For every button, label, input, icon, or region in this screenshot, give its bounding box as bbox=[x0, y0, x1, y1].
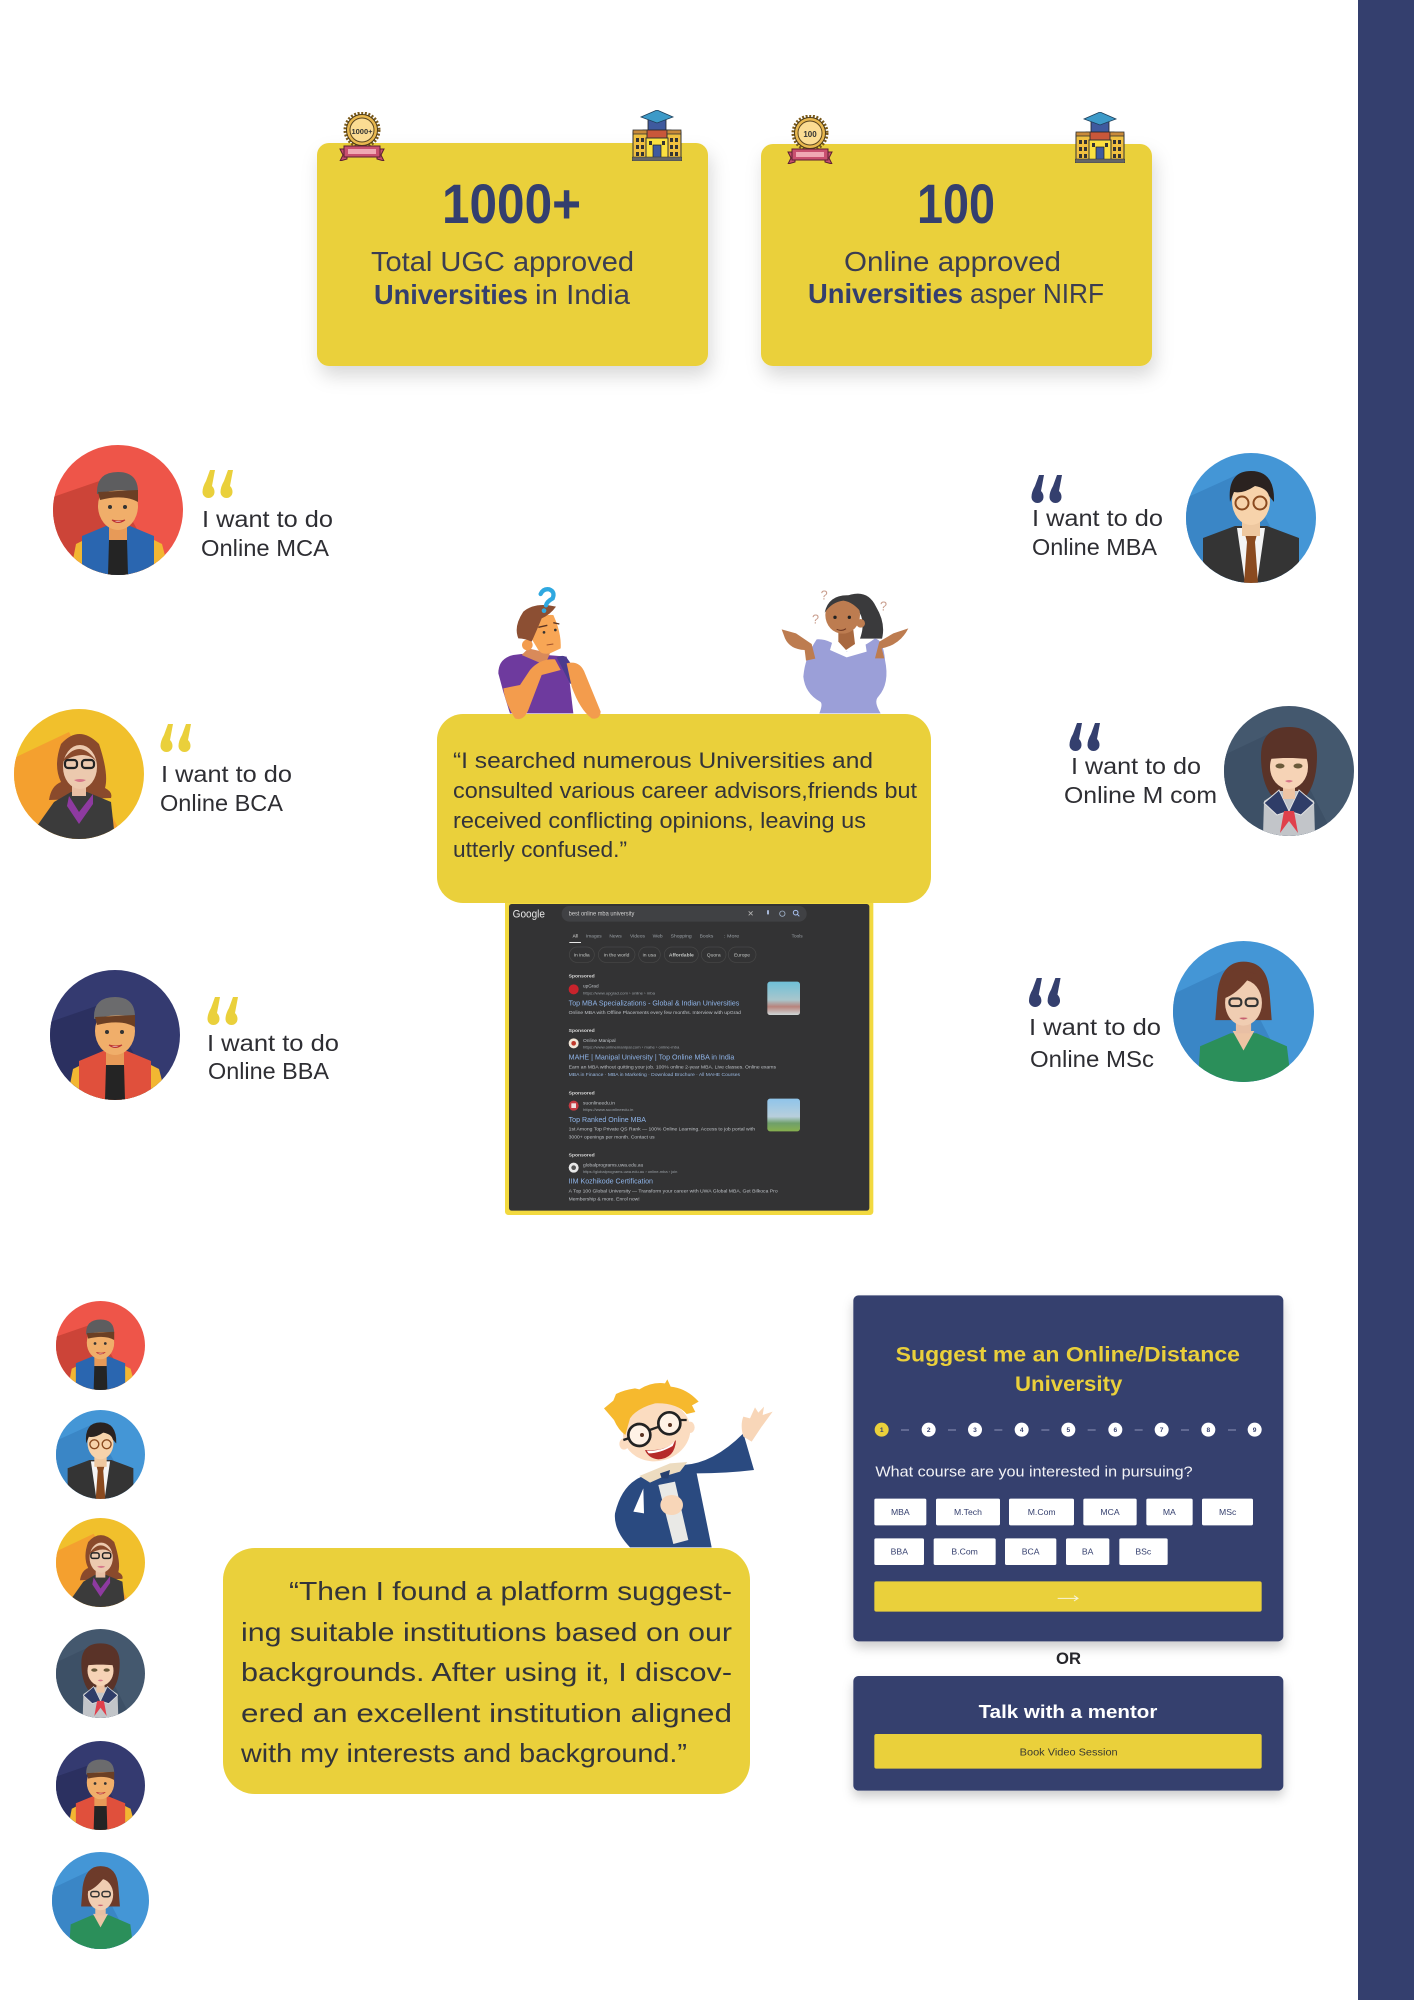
course option buttons bbox=[874, 1499, 1253, 1565]
course option buttons: MCA bbox=[1100, 1507, 1120, 1517]
step indicator 1 to 9: 1 bbox=[880, 1427, 884, 1434]
course option buttons: MBA bbox=[891, 1507, 910, 1517]
screenshot: Google search results: Affordable bbox=[669, 952, 694, 958]
speech text: Online M com bbox=[1064, 782, 1217, 808]
form title bbox=[896, 1344, 1240, 1396]
stat description: Total UGC approved bbox=[371, 246, 634, 277]
icon: quote mark bbox=[160, 724, 191, 752]
student: Online BCA bbox=[14, 709, 292, 839]
speech text: Online MSc bbox=[1030, 1046, 1154, 1072]
screenshot: Google search results: globalprograms.uwa.edu.au bbox=[583, 1162, 644, 1167]
illustration: confused woman shrugging: ? bbox=[812, 612, 819, 626]
screenshot: Google search results: Sponsored bbox=[569, 1090, 595, 1096]
form title: University bbox=[1015, 1373, 1123, 1396]
screenshot: Google search results: Earn an MBA without quitting your job. 100% online 2-year MBA. Live classes. Online exams bbox=[569, 1064, 777, 1069]
screenshot: Google search results: in the world bbox=[604, 952, 630, 958]
step indicator 1 to 9: 4 bbox=[1020, 1427, 1024, 1434]
course option buttons: MSc bbox=[1219, 1507, 1237, 1517]
screenshot: Google search results: In india bbox=[574, 952, 590, 958]
speech text bbox=[1064, 753, 1217, 808]
speech text: I want to do bbox=[202, 506, 333, 532]
speech text bbox=[1029, 1014, 1161, 1072]
illustration: confused woman shrugging bbox=[782, 588, 908, 713]
screenshot: Google search results: Tools bbox=[792, 934, 803, 940]
course option buttons: M.Com bbox=[1028, 1507, 1056, 1517]
stat description: Universities bbox=[374, 279, 528, 310]
illustration: confused woman shrugging: ? bbox=[821, 588, 828, 602]
quote text: ing suitable institutions based on our bbox=[241, 1617, 732, 1647]
illustration: graduate boy waving bbox=[604, 1379, 773, 1547]
step indicator 1 to 9: 3 bbox=[973, 1427, 977, 1434]
speech text: Online MBA bbox=[1032, 534, 1157, 560]
stat description: Universities bbox=[808, 278, 963, 309]
quote text: “I searched numerous Universities and bbox=[453, 748, 873, 773]
screenshot: Google search results: 1st Among Top Private QS Rank — 100% Online Learning. Access to job portal with bbox=[569, 1127, 755, 1132]
stat description bbox=[808, 246, 1104, 309]
speech text bbox=[201, 506, 333, 561]
next button with arrow bbox=[874, 1581, 1262, 1612]
quote text bbox=[240, 1576, 732, 1768]
step indicator 1 to 9: 7 bbox=[1160, 1427, 1164, 1434]
screenshot: Google search results: Videos bbox=[630, 934, 645, 940]
screenshot: Google search results: News bbox=[609, 934, 622, 940]
screenshot: Google search results: Sponsored bbox=[569, 1152, 595, 1158]
illustration: confused woman shrugging: ? bbox=[880, 600, 887, 614]
course option buttons: M.Tech bbox=[954, 1507, 982, 1517]
icon: quote mark bbox=[1070, 723, 1100, 751]
screenshot: Google search results: 3000+ openings per month. Contact us bbox=[569, 1134, 655, 1139]
stat number: 1000+: 1000+ bbox=[442, 172, 581, 235]
student: Online MBA bbox=[1032, 453, 1316, 583]
screenshot: Google search results: in usa bbox=[643, 952, 656, 958]
speech text: I want to do bbox=[1032, 505, 1163, 531]
screenshot: Google search results: All bbox=[573, 934, 578, 940]
avatar: boy with cap, red background bbox=[53, 445, 183, 575]
screenshot: Google search results: Top MBA Specializations - Global & Indian Universities bbox=[569, 1000, 740, 1007]
screenshot: Google search results: Online MBA with Offline Placements every few months. Interview with upGrad bbox=[569, 1010, 741, 1015]
speech text: Online BCA bbox=[160, 790, 283, 816]
speech bubble: confusion quote bbox=[437, 714, 931, 903]
speech text: I want to do bbox=[1071, 753, 1201, 779]
screenshot: Google search results: upGrad bbox=[583, 984, 599, 989]
speech text bbox=[1032, 505, 1163, 560]
quote text: with my interests and background.” bbox=[240, 1738, 687, 1768]
icon: quote mark bbox=[208, 997, 238, 1025]
screenshot: Google search results: suonlineedu.in bbox=[583, 1100, 615, 1105]
screenshot: Google search results: Web bbox=[653, 934, 663, 940]
icon: university building bbox=[1075, 112, 1125, 163]
student: Online MSc bbox=[1029, 941, 1314, 1082]
stat description: Online approved bbox=[844, 246, 1061, 277]
mentor heading: Talk with a mentor bbox=[979, 1701, 1157, 1722]
stat number: 100: 100 bbox=[917, 172, 995, 235]
avatar: boy with cap, navy background bbox=[50, 970, 180, 1100]
form question: What course are you interested in pursuing? bbox=[875, 1465, 1193, 1481]
screenshot: Google search results: IIM Kozhikode Certification bbox=[569, 1179, 653, 1186]
speech text: I want to do bbox=[1029, 1014, 1161, 1040]
panel: university suggestion form bbox=[853, 1295, 1283, 1641]
screenshot: Google search results: https://globalprograms.uwa.edu.au › online-mba › join bbox=[583, 1169, 677, 1174]
icon: quote mark bbox=[202, 470, 233, 498]
screenshot: Google search results: Images bbox=[586, 934, 602, 940]
speech text: I want to do bbox=[207, 1030, 339, 1056]
avatar: man in suit, blue background bbox=[1186, 453, 1316, 583]
book video session button bbox=[874, 1734, 1262, 1769]
course option buttons: MA bbox=[1163, 1507, 1176, 1517]
screenshot: Google search results: Top Ranked Online MBA bbox=[569, 1117, 646, 1124]
screenshot: Google search results: Quora bbox=[707, 952, 721, 958]
screenshot: Google search results: Online Manipal bbox=[583, 1038, 616, 1043]
quote text: utterly confused.” bbox=[453, 837, 627, 862]
illustration: thinking man with question mark bbox=[498, 589, 601, 719]
quote text: ered an excellent institution aligned bbox=[241, 1698, 732, 1728]
screenshot: Google search results: Membership & more. Enrol now! bbox=[569, 1196, 640, 1201]
screenshot: Google search results: Sponsored bbox=[569, 1028, 595, 1034]
icon: university building bbox=[632, 110, 682, 161]
quote text bbox=[453, 748, 917, 862]
screenshot: Google search results bbox=[505, 900, 873, 1215]
student: Online MCA bbox=[53, 445, 333, 575]
screenshot: Google search results: A Top 100 Global University — Transform your career with UWA Global MBA. Get Bilkoca Pro bbox=[569, 1188, 778, 1193]
screenshot: Google search results: https://www.upgrad.com › online › mba bbox=[583, 991, 656, 996]
speech text: I want to do bbox=[161, 761, 292, 787]
icon: quote mark bbox=[1032, 475, 1062, 503]
step indicator 1 to 9: 8 bbox=[1206, 1427, 1210, 1434]
screenshot: Google search results: Books bbox=[700, 934, 714, 940]
screenshot: Google search results: Google bbox=[513, 908, 545, 920]
icon: quote mark bbox=[1029, 978, 1061, 1007]
course option buttons: B.Com bbox=[951, 1547, 978, 1557]
icon: medal 1000+ bbox=[340, 113, 384, 161]
screenshot: Google search results: best online mba university bbox=[569, 912, 634, 918]
screenshot: Google search results: https://www.suonlineedu.in bbox=[583, 1107, 633, 1112]
panel: talk with a mentor bbox=[853, 1676, 1283, 1791]
screenshot: Google search results: : More bbox=[724, 934, 740, 940]
book video session button: Book Video Session bbox=[1020, 1747, 1118, 1758]
speech text: Online BBA bbox=[208, 1058, 329, 1084]
speech text: Online MCA bbox=[201, 535, 329, 561]
screenshot: Google search results: https://www.onlinemanipal.com › mahe › online-mba bbox=[583, 1045, 680, 1050]
course option buttons: BCA bbox=[1022, 1547, 1040, 1557]
stat description: asper NIRF bbox=[970, 278, 1104, 309]
speech text bbox=[160, 761, 292, 816]
label: OR: OR bbox=[1056, 1649, 1081, 1668]
icon: medal 1000+: 1000+ bbox=[351, 127, 373, 136]
avatar: girl in uniform, slate background bbox=[1224, 706, 1354, 836]
screenshot: Google search results: MAHE | Manipal University | Top Online MBA in India bbox=[569, 1055, 734, 1062]
quote text: received conflicting opinions, leaving us bbox=[453, 808, 866, 833]
speech text bbox=[207, 1030, 339, 1084]
screenshot: Google search results: Sponsored bbox=[569, 974, 595, 980]
avatar: woman with glasses, yellow background bbox=[14, 709, 144, 839]
stat card: 1000+ universities bbox=[317, 110, 708, 366]
avatar: woman in green, blue background bbox=[1173, 941, 1314, 1082]
quote text: “Then I found a platform suggest- bbox=[289, 1576, 732, 1606]
screenshot: Google search results: Shopping bbox=[671, 934, 692, 940]
form title: Suggest me an Online/Distance bbox=[896, 1344, 1240, 1367]
quote text: consulted various career advisors,friends but bbox=[453, 778, 917, 803]
course option buttons: BBA bbox=[891, 1547, 908, 1557]
course option buttons: BSc bbox=[1135, 1547, 1152, 1557]
course option buttons: BA bbox=[1082, 1547, 1094, 1557]
stat description: in India bbox=[535, 279, 630, 310]
stat description bbox=[371, 246, 634, 310]
quote text: backgrounds. After using it, I discov- bbox=[241, 1657, 732, 1687]
screenshot: Google search results: Europe bbox=[734, 952, 750, 958]
icon: medal 100: 100 bbox=[803, 130, 817, 139]
sidebar band bbox=[1358, 0, 1414, 2000]
step indicator 1 to 9: 5 bbox=[1066, 1427, 1070, 1434]
small avatars column bbox=[52, 1301, 149, 1949]
step indicator 1 to 9 bbox=[875, 1423, 1262, 1437]
student: Online BBA bbox=[50, 970, 339, 1100]
step indicator 1 to 9: 2 bbox=[927, 1427, 931, 1434]
step indicator 1 to 9: 6 bbox=[1113, 1427, 1117, 1434]
speech bubble: solution quote bbox=[223, 1548, 750, 1794]
student: Online M com bbox=[1064, 706, 1354, 836]
screenshot: Google search results: MBA in Finance · MBA in Marketing · Download Brochure · All MAHE Courses bbox=[569, 1072, 741, 1077]
stat card: 100 online universities bbox=[761, 112, 1152, 366]
icon: medal 100 bbox=[788, 116, 832, 164]
step indicator 1 to 9: 9 bbox=[1253, 1427, 1257, 1434]
